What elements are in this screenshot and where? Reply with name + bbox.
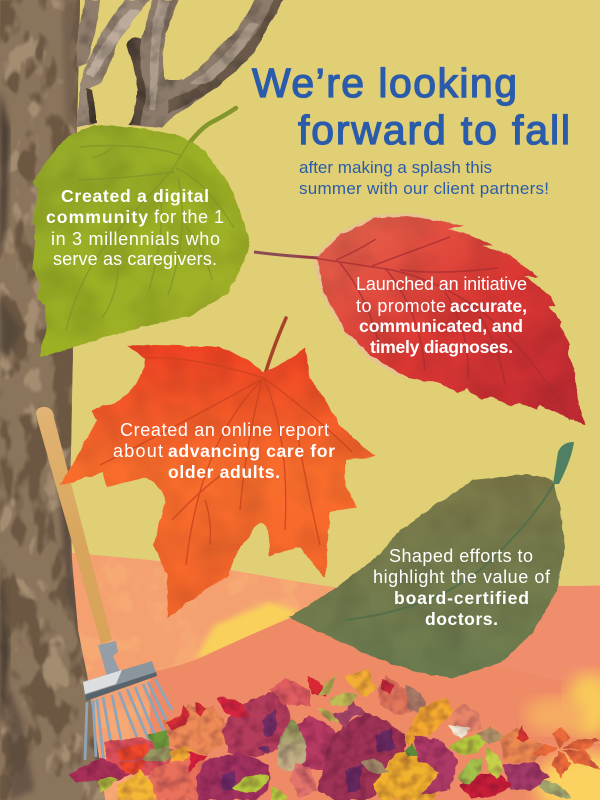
front hill [150, 586, 600, 800]
maple leaf veins [100, 358, 352, 565]
pile: lime leaf right [486, 748, 503, 778]
green leaf stem [184, 108, 236, 150]
pile: red behind rake [103, 737, 175, 775]
olive leaf text: doctors. [425, 609, 498, 629]
pile: chestnut leaf [530, 726, 600, 778]
pile: pink low [290, 762, 318, 798]
pile: maple right [500, 728, 543, 763]
pile: purple patches [220, 708, 278, 790]
green leaf veins [66, 141, 234, 330]
maple leaf shape [60, 345, 375, 618]
green leaf text: in 3 millennials who [51, 229, 220, 249]
pile: purple patches [345, 728, 395, 792]
panel: green leaf [33, 108, 250, 357]
branch highlight [150, 0, 170, 110]
branch: central [127, 0, 283, 128]
rake head [83, 661, 157, 698]
olive leaf shape [289, 474, 565, 678]
pile: olive tan leaf [277, 718, 306, 770]
red leaf text: Launched an initiative [356, 274, 527, 294]
branch shadow [127, 38, 146, 125]
red leaf text: to promote [356, 296, 446, 316]
back hill [72, 550, 600, 800]
pile: coral mass [150, 755, 232, 800]
pile: tan leaf [360, 759, 388, 773]
panel: olive leaf [289, 442, 574, 678]
pile: green leaf small upper [318, 676, 336, 697]
branch: narrow left [76, 0, 100, 67]
green leaf text: for the 1 [154, 207, 224, 227]
pile: green leaf top left [330, 692, 357, 707]
green leaf text [46, 186, 224, 269]
rake [36, 407, 193, 767]
title [252, 60, 570, 153]
title: forward to fall [298, 107, 570, 153]
pile: red spiky leaf [186, 752, 208, 773]
pile: yellow leaf lower [373, 745, 440, 800]
pile: small green [405, 743, 418, 757]
leaf pile [68, 668, 600, 800]
pile: green behind rake [148, 730, 170, 750]
pile: green leaf small lower [318, 708, 338, 722]
pile: lime leaf lower [458, 757, 482, 784]
branch highlight [190, 22, 258, 85]
rake ferrule [98, 641, 122, 682]
red leaf text: timely diagnoses. [370, 337, 513, 357]
pile: maple centre [452, 703, 482, 732]
pile: lime leaf top [449, 736, 484, 754]
tree branches [76, 0, 283, 128]
olive leaf stem [553, 442, 574, 484]
olive leaf midrib [345, 484, 554, 620]
pile: magenta fern [413, 735, 458, 796]
pile: pink top [270, 678, 310, 707]
title: We’re looking [252, 60, 517, 106]
pile: white fragment [448, 725, 472, 738]
pile: big magenta [318, 712, 405, 800]
pile: orange yellow leaf [404, 698, 455, 745]
branch shadow [86, 88, 97, 123]
pile: red oval leaf [460, 773, 512, 798]
red leaf stem [254, 252, 320, 258]
pile: lime small [270, 786, 287, 800]
pile: maple mid [378, 676, 412, 715]
pile: lime leaf lower centre [233, 774, 268, 793]
pile: maple red [381, 678, 394, 694]
red leaf text: communicated, and [359, 316, 523, 336]
pile: magenta spikes [330, 695, 366, 728]
green leaf text: Created a digital [61, 186, 209, 206]
red leaf shape [317, 216, 585, 425]
pile: grey green leaf [537, 782, 572, 798]
red leaf text: accurate, [450, 296, 527, 316]
pile: yellow leaf top [345, 668, 375, 697]
maple leaf text: older adults. [168, 462, 280, 482]
maple leaf text: about [113, 441, 163, 461]
green leaf text: serve as caregivers. [53, 249, 217, 269]
panel: orange maple leaf [60, 318, 375, 618]
green leaf text: community [46, 207, 148, 227]
pile: maple right red [517, 725, 528, 742]
subtitle: after making a splash this [299, 158, 492, 177]
branch: angled [77, 0, 150, 127]
maple leaf text: advancing care for [168, 441, 335, 461]
pile: red small [307, 677, 327, 697]
tree trunk [0, 0, 110, 800]
maple leaf text [113, 420, 335, 482]
pile: yellow maple [117, 770, 157, 800]
olive leaf text [373, 546, 551, 629]
pile: red leaf [217, 698, 250, 718]
panel: red leaf [254, 213, 585, 425]
pile: magenta upper [222, 692, 293, 757]
maple leaf stem [264, 318, 286, 378]
rake tines [85, 679, 193, 767]
olive leaf text: highlight the value of [373, 567, 551, 587]
pile: tan green leaf [142, 743, 172, 762]
pile: mauve leaf [405, 684, 427, 713]
pile: magenta lower [196, 752, 270, 800]
pile: magenta right [503, 762, 550, 790]
branch highlight [86, 10, 140, 78]
pile: orange red maple [117, 743, 148, 773]
subtitle [299, 158, 549, 198]
green leaf shape [33, 125, 250, 357]
rake handle [36, 407, 112, 644]
pile: tan right [475, 727, 505, 745]
olive leaf text: Shaped efforts to [389, 546, 533, 566]
pile: lime pair left [98, 777, 118, 793]
pile: maple red tips [165, 702, 207, 730]
branch shadow [168, 0, 283, 113]
maple leaf text: Created an online report [120, 420, 329, 440]
red leaf text [356, 274, 527, 357]
red leaf veins [300, 237, 570, 420]
pile: magenta spiky left [68, 758, 130, 782]
pile: magenta mid right [290, 715, 345, 770]
pile: small yellow maple [170, 745, 192, 762]
olive leaf text: board-certified [394, 588, 529, 608]
pile: maple clump left [163, 703, 227, 760]
red leaf pale edge [312, 213, 455, 378]
subtitle: summer with our client partners! [299, 179, 549, 198]
